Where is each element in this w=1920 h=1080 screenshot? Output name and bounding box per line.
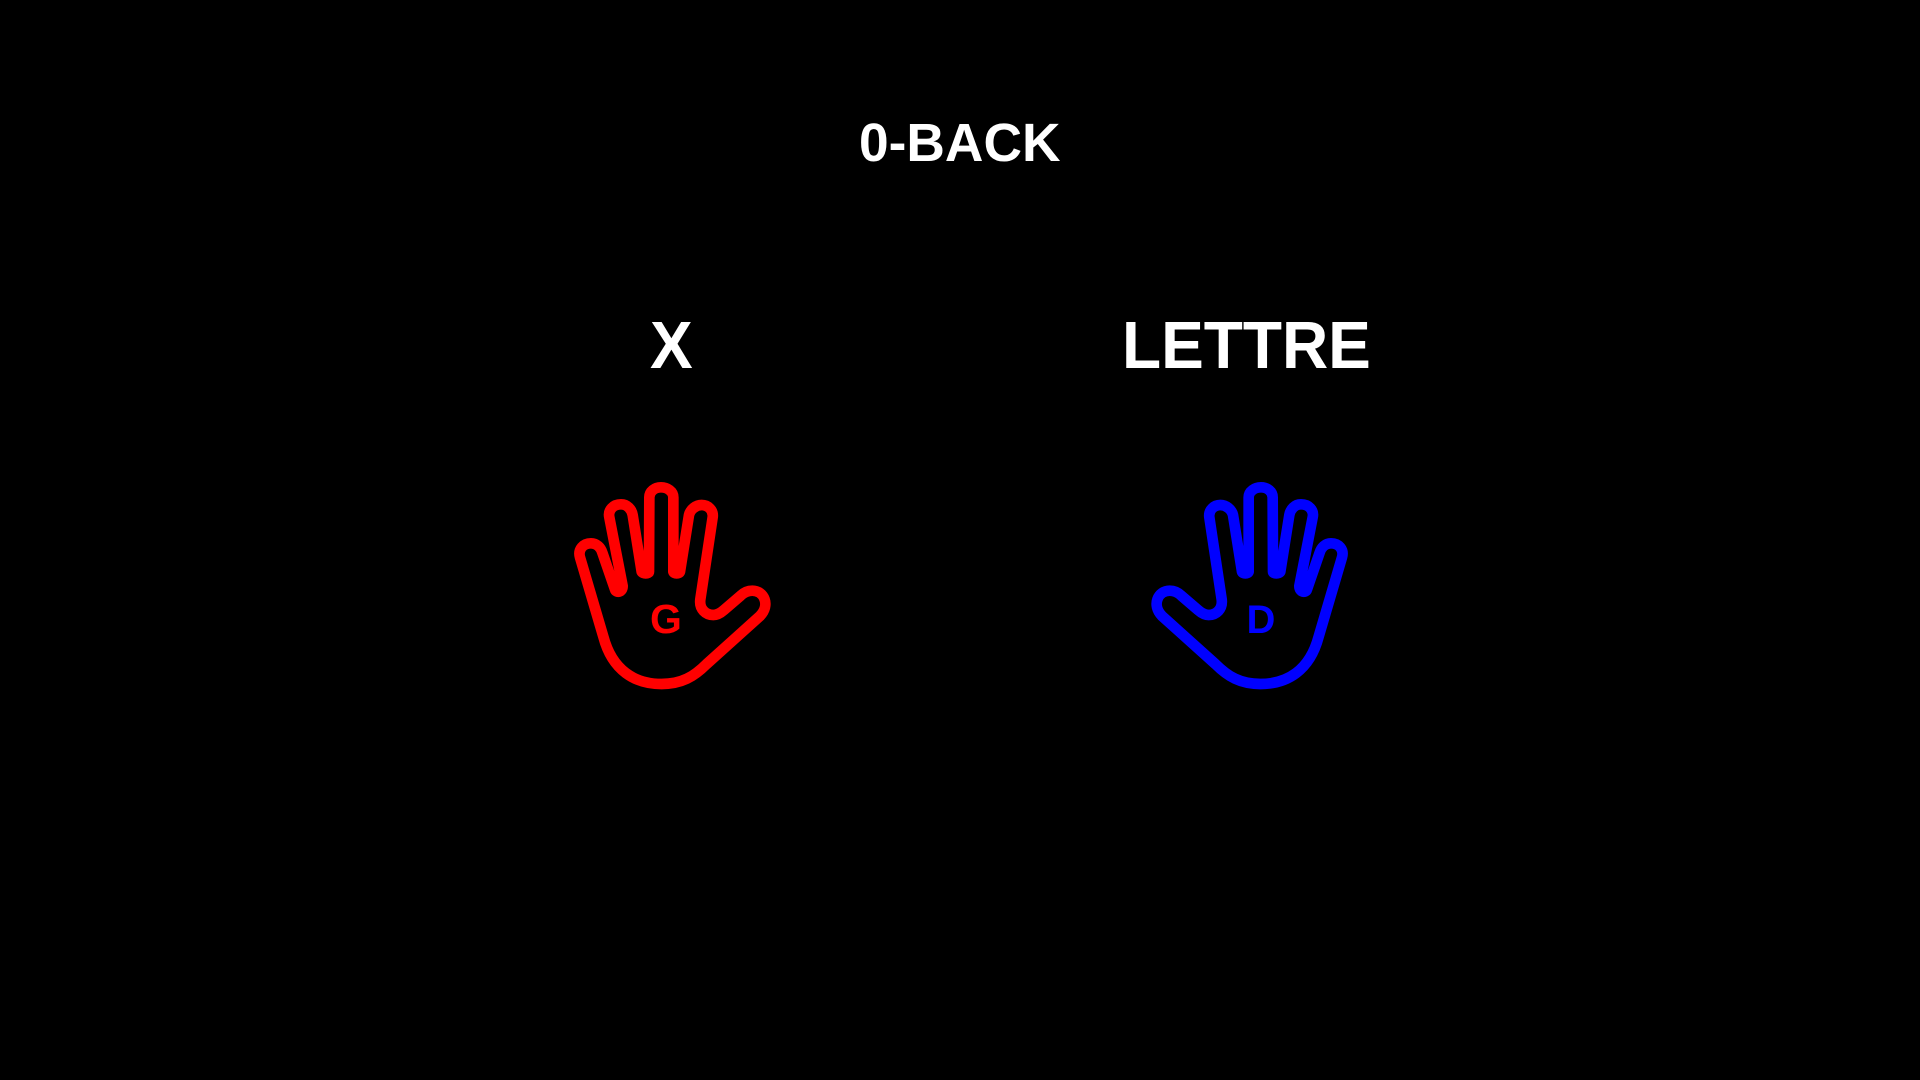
icon: left hand (red) (579, 487, 765, 684)
title: 0-BACK (859, 114, 1061, 173)
icon: left hand (red): G (650, 596, 682, 642)
icon: right hand (blue): D (1247, 598, 1275, 642)
left label: X: X (650, 308, 693, 382)
icon: right hand (blue) (1157, 487, 1343, 684)
right label: LETTRE: LETTRE (1122, 308, 1371, 382)
